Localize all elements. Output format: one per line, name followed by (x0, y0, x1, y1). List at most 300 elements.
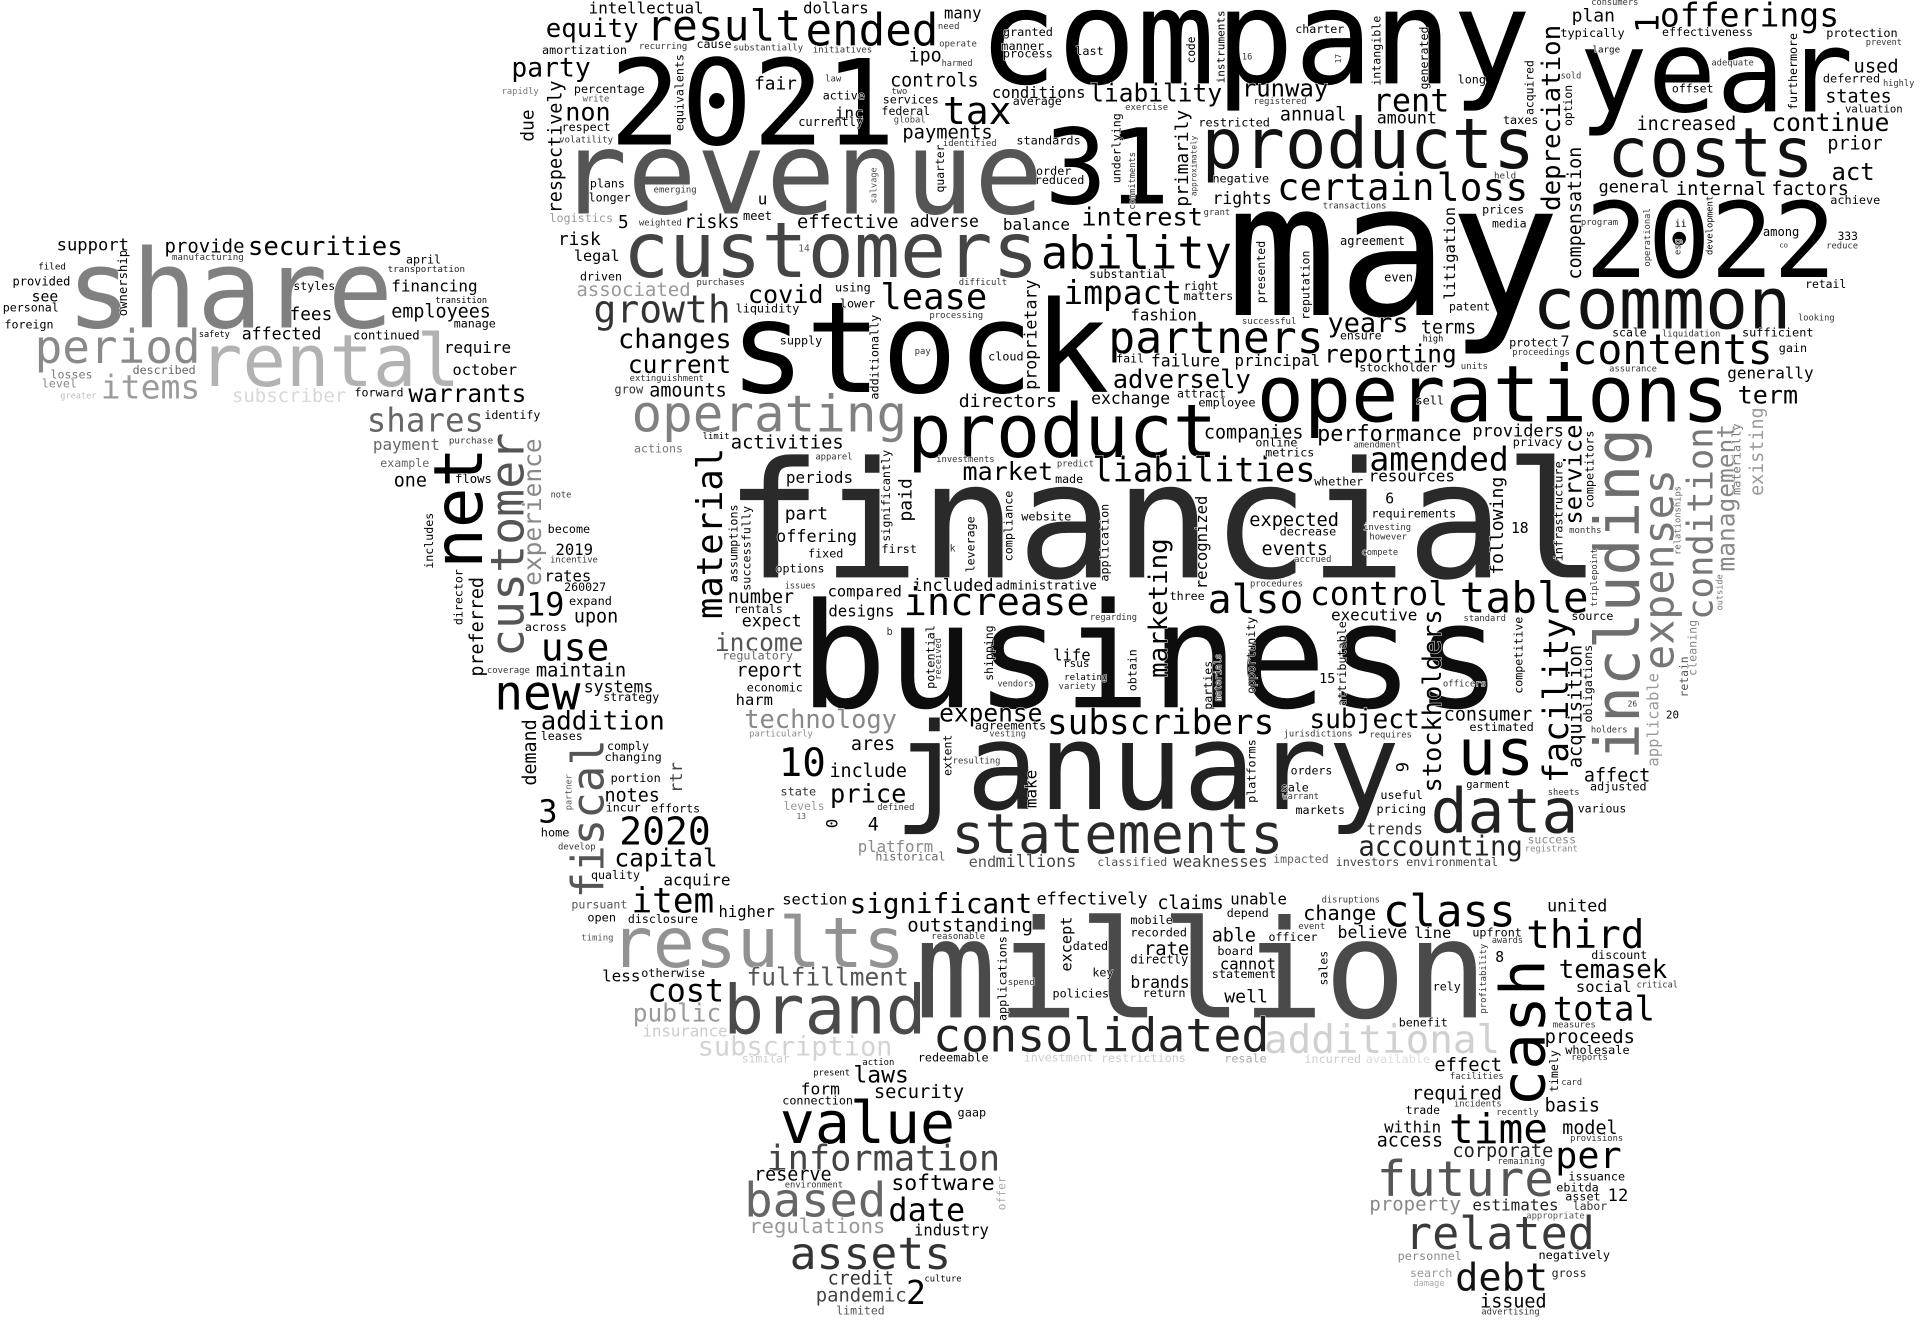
cluster: waist band: statement (1212, 967, 1276, 981)
cluster: waist band: board (1217, 944, 1253, 958)
cluster: middle body: 10 (779, 741, 826, 786)
word: period: period (35, 320, 201, 374)
cluster: middle body (634, 407, 1768, 871)
cluster: waist band: cost (647, 971, 724, 1009)
cluster: middle body: 26 (1628, 700, 1637, 709)
cluster: middle body: holders (1591, 726, 1628, 736)
cluster: middle body: liabilities (1092, 451, 1315, 490)
cluster: waist band: return (1143, 986, 1186, 1000)
cluster: upper body: adversely (1113, 365, 1251, 395)
word: financial: financial (725, 428, 1601, 616)
cluster: waist band: believe (1338, 923, 1407, 942)
cluster: middle body: relating (1064, 673, 1107, 683)
cluster: upper body: typically (1560, 26, 1625, 40)
cluster: upper body: prices (1482, 202, 1524, 216)
cluster: left foot: environment (785, 1181, 843, 1191)
cluster: middle body: 6 (1385, 490, 1394, 507)
word: million: million (915, 892, 1488, 1050)
cluster: upper body: risk (558, 230, 601, 250)
cluster: middle body: metrics (1265, 446, 1314, 460)
cluster: raised hand: greater (60, 391, 96, 401)
cluster: arm: acquire (663, 871, 730, 890)
cluster: upper body: furthermore (1786, 33, 1800, 110)
cluster: middle body: harm (736, 691, 773, 709)
word: costs: costs (1607, 114, 1814, 194)
cluster: waist band: otherwise (641, 966, 705, 980)
word: future: future (1377, 1150, 1554, 1208)
cluster: upper body: respectively (546, 81, 567, 213)
cluster: upper body: compensation (1565, 147, 1586, 279)
cluster: arm: home (541, 826, 569, 840)
cluster: upper body: restricted (1198, 116, 1270, 130)
cluster: upper body: 17 (1334, 54, 1343, 63)
cluster: raised hand: level (42, 376, 77, 390)
cluster: middle body: paid (896, 478, 917, 522)
cluster: upper body: liquidation (1662, 330, 1720, 340)
cluster: waist band: upfront (1472, 925, 1522, 939)
cluster: right foot: model (1562, 1118, 1618, 1139)
cluster: right foot: advertising (1481, 1308, 1540, 1318)
cluster: upper body: operate (939, 40, 977, 50)
cluster: middle body: service (1559, 424, 1587, 525)
cluster: upper body: legal (574, 247, 620, 265)
cluster: upper body: sold (1561, 71, 1581, 81)
word: business: business (799, 573, 1502, 742)
cluster: middle body: issues (785, 581, 816, 591)
cluster: upper body: successful (1242, 317, 1296, 327)
cluster: waist band: applications (996, 936, 1010, 1021)
cluster: upper body: exchange (1091, 389, 1170, 408)
word: 2021: 2021 (609, 36, 896, 174)
cluster: upper body: 7 (1561, 334, 1569, 351)
cluster: middle body: providers (1472, 420, 1564, 440)
cluster: left foot: action (862, 1058, 894, 1068)
cluster: upper body: generated (1417, 26, 1431, 89)
cluster: middle body: performance (1317, 422, 1462, 447)
word: fiscal: fiscal (563, 739, 614, 898)
cluster: upper body: impact (1063, 274, 1182, 312)
cluster: arm: includes (422, 513, 436, 569)
cluster: upper body: option (1561, 85, 1575, 126)
word: based: based (744, 1173, 886, 1228)
cluster: upper body: last (1075, 44, 1104, 58)
word: operations: operations (1257, 350, 1729, 441)
cluster: middle body: existing (1747, 407, 1768, 496)
cluster: middle body: technology (744, 704, 897, 734)
cluster: arm: become (548, 522, 590, 536)
cluster: raised hand: foreign (5, 317, 54, 331)
cluster: upper body: extinguishment (630, 374, 704, 384)
word: stock: stock (730, 275, 1110, 422)
cluster: upper body: exercise (1125, 103, 1168, 113)
cluster: middle body: ares (851, 734, 895, 755)
cluster: middle body: 20 (1666, 708, 1679, 721)
cluster: upper body: process (1003, 46, 1053, 60)
cluster: right foot: personnel (1398, 1249, 1462, 1263)
word: product: product (907, 390, 1217, 475)
cluster: waist band: directly (1130, 952, 1188, 966)
cluster: middle body: vesting (989, 730, 1026, 740)
cluster: right foot: property (1369, 1193, 1461, 1215)
cluster: upper body: general (1599, 176, 1669, 196)
cluster: upper body: currently (798, 115, 863, 129)
word: operating: operating (632, 384, 907, 443)
cluster: middle body: platforms (1244, 739, 1258, 803)
cluster: raised hand: provide (165, 235, 245, 257)
cluster: right foot: estimates (1472, 1195, 1559, 1214)
cluster: arm: efforts (651, 802, 700, 816)
cluster: upper body: large (1592, 45, 1620, 56)
cluster: arm: use (541, 626, 609, 670)
cluster: waist band: section (782, 891, 847, 909)
cluster: upper body: proceedings (1512, 348, 1570, 358)
cluster: waist band: wholesale (1565, 1043, 1630, 1057)
cluster: upper body: adequate (1711, 59, 1754, 69)
cluster: waist band: discount (1591, 948, 1647, 962)
word: results: results (611, 903, 905, 984)
cluster: middle body: 9 (1394, 762, 1414, 772)
cluster: middle body: standard (1464, 614, 1506, 624)
cluster: upper body: longer (589, 191, 631, 205)
cluster: right foot: gross (1552, 1266, 1587, 1280)
cluster: upper body: identified (943, 139, 997, 149)
cluster: left foot: form (801, 1080, 840, 1099)
cluster: arm: 3 (538, 792, 558, 830)
cluster: waist band: awards (1492, 936, 1523, 946)
cluster: upper body: lower (840, 296, 875, 310)
cluster: middle body: source (1571, 609, 1613, 623)
cluster: right foot: incidents (1454, 1099, 1502, 1109)
cluster: upper body: difficult (959, 278, 1007, 288)
cluster: raised hand: items (101, 367, 200, 406)
cluster: middle body: options (776, 561, 825, 575)
cluster: middle body: acquisition (1565, 645, 1586, 768)
cluster: raised hand: employees (391, 301, 491, 322)
cluster: upper body: ii (1675, 219, 1687, 230)
cluster: arm: quality (591, 868, 640, 882)
cluster: middle body: levels (783, 799, 825, 813)
cluster: waist band: event (1298, 922, 1325, 932)
cluster: middle body: requires (1369, 731, 1412, 741)
cluster: middle body: rentals (734, 602, 783, 616)
cluster: upper body: prior (1827, 134, 1883, 155)
cluster: middle body: competitive (1512, 617, 1526, 694)
cluster: middle body: marketing (1144, 538, 1174, 678)
cluster: upper body: weighted (639, 219, 682, 229)
cluster: upper body: patent (1449, 300, 1490, 314)
cluster: upper body: reporting (1324, 340, 1457, 369)
cluster: upper body: years (1327, 308, 1409, 339)
cluster: upper body: matters (1184, 289, 1233, 303)
cluster: middle body: 4 (868, 815, 879, 836)
cluster: upper body: party (511, 54, 591, 84)
word: share: share (66, 226, 393, 353)
cluster: arm: expand (569, 594, 612, 608)
cluster: upper body: substantially (733, 43, 804, 53)
cluster: upper body: failure (1151, 351, 1220, 370)
cluster: middle body: sale (1281, 781, 1309, 795)
cluster: left foot: 2 (906, 1273, 926, 1312)
cluster: middle body: infrastructure (1551, 461, 1565, 561)
cluster: upper body: salvage (870, 167, 880, 203)
word: customer: customer (481, 433, 535, 657)
cluster: raised hand: transition (435, 296, 487, 306)
cluster: middle body: orders (1291, 764, 1332, 778)
cluster: waist band: insurance (643, 1021, 727, 1040)
cluster: middle body: companies (1204, 422, 1303, 443)
cluster: left foot: culture (924, 1274, 962, 1284)
cluster: waist band: well (1224, 987, 1268, 1008)
word: subscription: subscription (698, 1031, 892, 1062)
cluster: left foot (749, 1058, 1008, 1318)
cluster: left foot: connection (782, 1093, 853, 1107)
cluster: middle body: 15 (1319, 671, 1335, 687)
cluster: upper body: inc (835, 103, 864, 122)
cluster: upper body: instruments (1214, 10, 1227, 83)
cluster: arm: maintain (536, 661, 626, 682)
cluster: right foot: ebitda (1556, 1180, 1599, 1194)
cluster: arm: identify (484, 408, 540, 422)
cluster: right foot: trade (1406, 1103, 1440, 1117)
cluster: waist band: sales (1316, 951, 1330, 985)
cluster: upper body: dollars (803, 0, 869, 17)
cluster: waist band: depend (1227, 906, 1269, 920)
cluster: middle body: however (1369, 532, 1408, 542)
cluster: middle body: whether (1314, 474, 1363, 488)
cluster: upper body: high (1423, 335, 1443, 345)
cluster: middle body: expense (939, 698, 1042, 727)
cluster: upper body: pay (915, 347, 931, 357)
cluster: raised hand: filed (38, 262, 66, 273)
cluster: middle body: accounting (1358, 832, 1523, 863)
cluster: middle body: obligations (1581, 645, 1595, 723)
word: revenue: revenue (558, 107, 1043, 241)
cluster: middle body: extent (940, 735, 954, 776)
word: rental: rental (199, 320, 460, 404)
cluster: raised hand: transportation (388, 264, 465, 275)
cluster: upper body: need (938, 22, 959, 32)
cluster: upper body: manner (1001, 39, 1044, 53)
cluster: upper body: adverse (910, 212, 979, 231)
cluster: middle body: markets (1295, 803, 1345, 817)
cluster: upper body: reputation (1298, 251, 1312, 320)
cluster: upper body: active (823, 88, 865, 102)
cluster: middle body: compete (1362, 548, 1398, 558)
cluster: middle body: millions (996, 851, 1076, 871)
word: information: information (766, 1139, 1000, 1180)
cluster: upper body: operational (1643, 208, 1653, 267)
cluster: middle body: adjusted (1590, 780, 1647, 794)
cluster: upper body: offset (1672, 82, 1714, 96)
cluster: upper body: intangible (1369, 16, 1383, 86)
cluster: upper body: equity (546, 14, 639, 44)
word: january: january (894, 699, 1400, 838)
cluster: middle body: end (969, 853, 996, 871)
cluster: upper body: proprietary (1021, 279, 1040, 390)
cluster: raised hand: support (57, 236, 129, 256)
cluster: waist band: officer (1269, 930, 1318, 944)
cluster: upper body: granted (1003, 25, 1053, 39)
cluster: arm: upon (574, 607, 618, 628)
cluster: raised hand: continued (353, 329, 420, 343)
cluster: arm: demand (520, 719, 541, 786)
cluster: middle body: limit (703, 432, 730, 442)
cluster: upper body: lease (880, 277, 987, 318)
cluster: upper body: liquidity (736, 302, 799, 316)
cluster: waist band: rate (1144, 938, 1189, 960)
cluster: middle body: environmental (1406, 855, 1498, 869)
cluster: waist band: redeemable (918, 1050, 989, 1064)
word: year: year (1579, 6, 1853, 139)
cluster: upper body: sufficient (1742, 326, 1814, 340)
cluster: raised hand: personal (3, 300, 59, 314)
cluster: upper body: meet (743, 209, 772, 223)
cluster: waist band: 8 (1495, 949, 1504, 966)
cluster: arm: new (494, 667, 581, 722)
cluster: arm: changing (605, 750, 662, 764)
cluster: upper body: non (565, 98, 611, 127)
cluster: waist band: recorded (1130, 925, 1187, 939)
cluster: waist band: disruptions (1322, 895, 1380, 905)
cluster: upper body: program (1581, 218, 1618, 228)
cluster: raised hand: fees (290, 305, 332, 325)
cluster: upper body: rapidly (502, 87, 539, 97)
cluster: middle body: regarding (1090, 613, 1137, 623)
cluster: upper body: annual (1280, 105, 1346, 126)
cluster: middle body: retain (1677, 656, 1691, 697)
cluster: upper body: law (825, 75, 842, 85)
cluster: right foot: damage (1414, 1279, 1445, 1289)
cluster: upper body: tax (943, 89, 1011, 133)
cluster: middle body: investing (1363, 523, 1411, 533)
cluster: waist band: united (1547, 896, 1607, 915)
cluster: upper body: even (1384, 271, 1413, 285)
cluster: upper body: initiatives (813, 46, 872, 56)
cluster: waist band: less (602, 966, 640, 985)
cluster: raised hand: april (406, 253, 441, 267)
cluster: arm: notes (605, 786, 660, 807)
cluster: raised hand: ownership (116, 250, 130, 316)
cluster: raised hand: styles (293, 279, 335, 293)
cluster: middle body: resources (1369, 467, 1455, 486)
cluster: upper body: controls (890, 71, 979, 92)
cluster: upper body: acquired (1523, 60, 1537, 115)
cluster: upper body: development (1706, 196, 1716, 255)
cluster: waist band: public (633, 999, 721, 1028)
cluster: waist band: except (1058, 917, 1076, 972)
cluster: upper body: plans (590, 177, 625, 191)
cluster: upper body: loss (1437, 166, 1528, 210)
cluster: arm: leases (541, 729, 583, 743)
cluster: waist band: resale (1224, 1052, 1267, 1066)
cluster: arm: higher (719, 903, 775, 921)
cluster: arm: addition (541, 706, 665, 736)
cluster: middle body: weaknesses (1173, 852, 1268, 871)
cluster: right foot: corporate (1452, 1141, 1553, 1162)
cluster: left foot: laws (853, 1062, 909, 1088)
cluster: middle body: procedures (1250, 580, 1303, 590)
cluster: middle body: privacy (1513, 435, 1562, 449)
cluster: middle body: successfully (739, 506, 753, 591)
cluster: waist band: significant (850, 887, 1032, 920)
cluster: upper body: growth (594, 287, 731, 331)
cluster: upper body: employee (1198, 396, 1256, 410)
cluster: arm: incentive (550, 556, 598, 566)
cluster: middle body: 13 (796, 812, 806, 821)
cluster: middle body: management (1711, 424, 1740, 572)
word: data: data (1431, 776, 1578, 847)
cluster: upper body: commitments (1128, 152, 1138, 210)
cluster: waist band: cannot (1220, 956, 1276, 974)
cluster: upper body: ability (1041, 226, 1232, 279)
cluster: upper body: units (1461, 362, 1488, 372)
cluster: upper body: effectiveness (1662, 25, 1753, 39)
cluster: waist band: investment (1024, 1050, 1094, 1064)
cluster: upper body: term (1738, 380, 1798, 409)
cluster: raised hand: described (133, 363, 196, 377)
cluster: upper body: increased (1637, 114, 1736, 135)
cluster: middle body: requirements (1371, 506, 1456, 520)
cluster: upper body: litigation (1441, 207, 1459, 300)
word: statements: statements (951, 803, 1283, 867)
cluster: waist band: third (1526, 913, 1644, 958)
cluster: middle body: cleaning (1686, 620, 1700, 676)
cluster: arm: open (587, 911, 616, 925)
cluster: middle body: events (1262, 539, 1328, 560)
cluster: upper body: respect (562, 120, 611, 134)
cluster: arm: pursuant (571, 897, 627, 911)
cluster: upper body: amortization (542, 43, 627, 57)
cluster: right foot: negatively (1539, 1248, 1610, 1262)
cluster: waist band: effectively (1036, 889, 1148, 909)
cluster: upper body: 5 (618, 213, 629, 233)
cluster: upper body: standards (1016, 134, 1081, 148)
cluster: middle body: life (1053, 647, 1091, 665)
word: time: time (1449, 1105, 1548, 1153)
cluster: upper body: registered (1254, 97, 1307, 107)
cluster: left foot: security (874, 1082, 964, 1103)
cluster: arm: partner (564, 774, 574, 810)
cluster: upper body: factors (1771, 179, 1849, 200)
cluster: middle body: estimated (1469, 720, 1534, 734)
cluster: waist band: reasonable (931, 932, 985, 942)
cluster: upper body: supply (780, 333, 822, 347)
cluster: middle body: accrued (1294, 555, 1331, 565)
cluster: upper body: among (1763, 225, 1799, 239)
cluster: middle body: outside (1715, 574, 1725, 610)
cluster: upper body: stockholder (1359, 360, 1437, 374)
cluster: upper body: transactions (1323, 201, 1386, 211)
cluster: waist band: dated (1073, 939, 1108, 953)
cluster: arm: timing (581, 934, 614, 944)
cluster: upper body: underlying (1110, 113, 1124, 183)
cluster: middle body: administrative (996, 579, 1097, 593)
cluster: middle body: part (785, 504, 828, 525)
cluster: arm: payment (373, 435, 440, 454)
cluster: upper body: quarter (933, 144, 947, 192)
cluster: middle body: k (950, 544, 956, 555)
cluster: middle body: compliance (1002, 491, 1016, 561)
cluster: upper body: result (646, 1, 801, 51)
cluster: upper body: federal (882, 104, 930, 118)
word: assets: assets (790, 1227, 951, 1280)
cluster: middle body: increase (904, 580, 1090, 625)
cluster: middle body: included (912, 575, 994, 595)
cluster: waist band: policies (1053, 987, 1109, 1001)
cluster: arm: comply (607, 739, 649, 753)
cluster: upper body: conditions (992, 84, 1085, 102)
cluster: upper body: grow (614, 382, 644, 396)
